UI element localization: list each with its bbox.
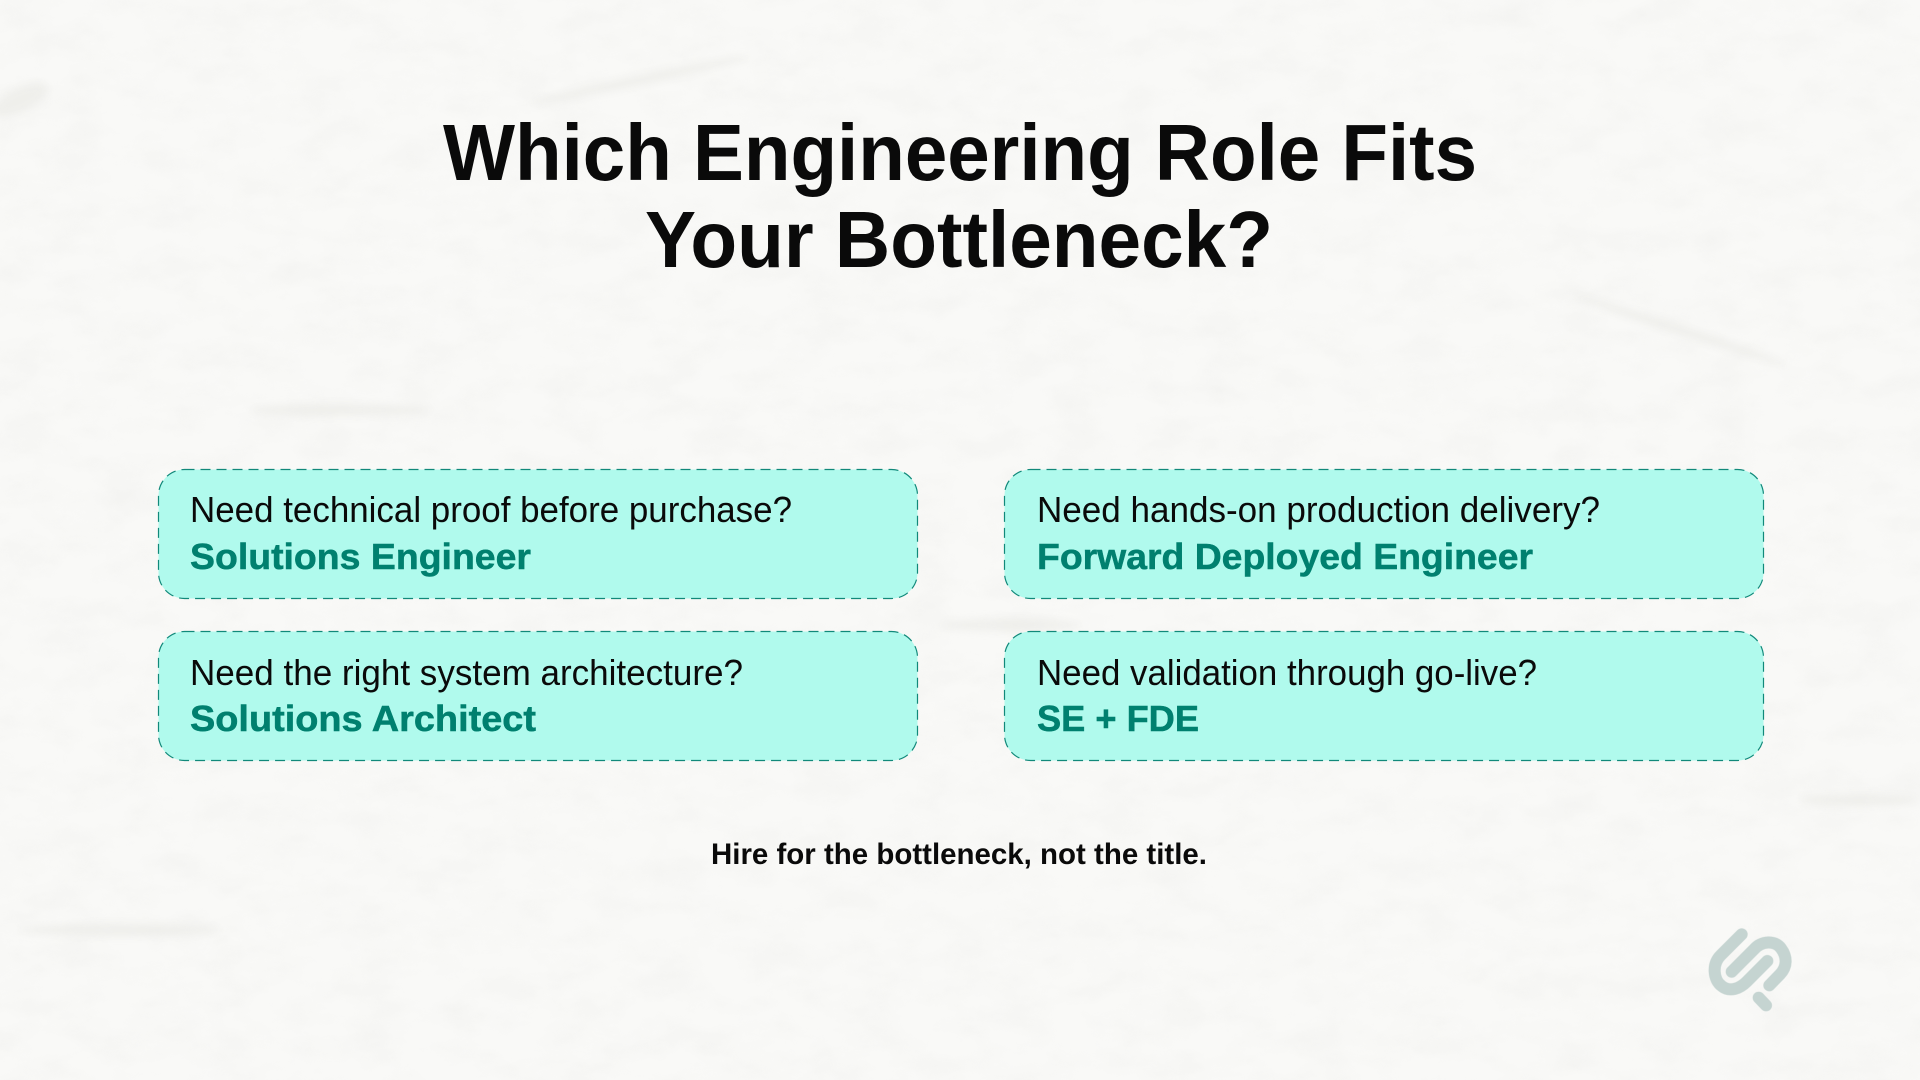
panel: Forward Deployed Engineer <box>1004 470 1764 598</box>
title: Which Engineering Role Fits <box>443 108 1477 197</box>
panel: Solutions Engineer <box>158 470 918 598</box>
panel: Solutions Architect <box>158 632 918 760</box>
closing statement: Hire for the bottleneck, not the title. <box>711 838 1207 871</box>
panel: SE + FDE <box>1004 632 1764 760</box>
panel: SE + FDE: SE + FDE <box>1037 698 1199 739</box>
panel: Solutions Architect: Need the right system architecture? <box>190 652 743 693</box>
title <box>443 108 1477 284</box>
title: Your Bottleneck? <box>645 195 1273 284</box>
icon: logo <box>1715 934 1786 1005</box>
panel: Forward Deployed Engineer: Need hands-on production delivery? <box>1037 489 1600 530</box>
panel: Solutions Engineer: Solutions Engineer <box>190 536 531 577</box>
panel: Forward Deployed Engineer: Forward Deployed Engineer <box>1037 536 1533 577</box>
panel: Solutions Engineer: Need technical proof before purchase? <box>190 489 792 530</box>
panel: SE + FDE: Need validation through go-live? <box>1037 652 1537 693</box>
panel: Solutions Architect: Solutions Architect <box>190 698 536 739</box>
